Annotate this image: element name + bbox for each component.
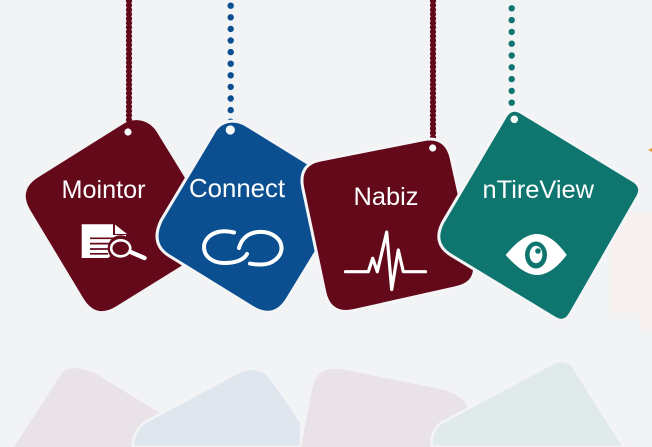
tag shape	[26, 120, 215, 311]
tag hole	[124, 128, 132, 136]
small orange mark at right edge	[648, 148, 652, 152]
chain: blue dots	[227, 6, 234, 122]
tag hole	[429, 144, 436, 152]
panel: Mointor tag	[26, 120, 215, 311]
heading: Connect: Connect	[189, 175, 285, 203]
icon: linked rings	[204, 231, 282, 264]
panel: nTireView tag	[440, 112, 638, 319]
panel: Connect tag	[159, 123, 343, 311]
reflection of the tags	[14, 361, 624, 447]
tag hole	[510, 116, 518, 123]
chain: teal dots	[509, 8, 515, 104]
chain: maroon right	[431, 0, 435, 142]
tag shape	[159, 123, 343, 311]
panel: Nabiz tag	[303, 141, 473, 310]
chain: maroon left	[127, 0, 131, 124]
icon: eye	[506, 234, 567, 275]
heading: Nabiz: Nabiz	[354, 183, 418, 211]
icon: document with magnifier	[82, 224, 144, 261]
heading: Mointor: Mointor	[62, 176, 146, 204]
tag shape	[440, 112, 638, 319]
icon: heartbeat line	[346, 232, 426, 290]
heading: nTireView: nTireView	[482, 176, 595, 204]
tag shape	[303, 141, 473, 310]
tag hole	[226, 125, 235, 135]
faint pink artifact at right edge	[610, 213, 652, 330]
